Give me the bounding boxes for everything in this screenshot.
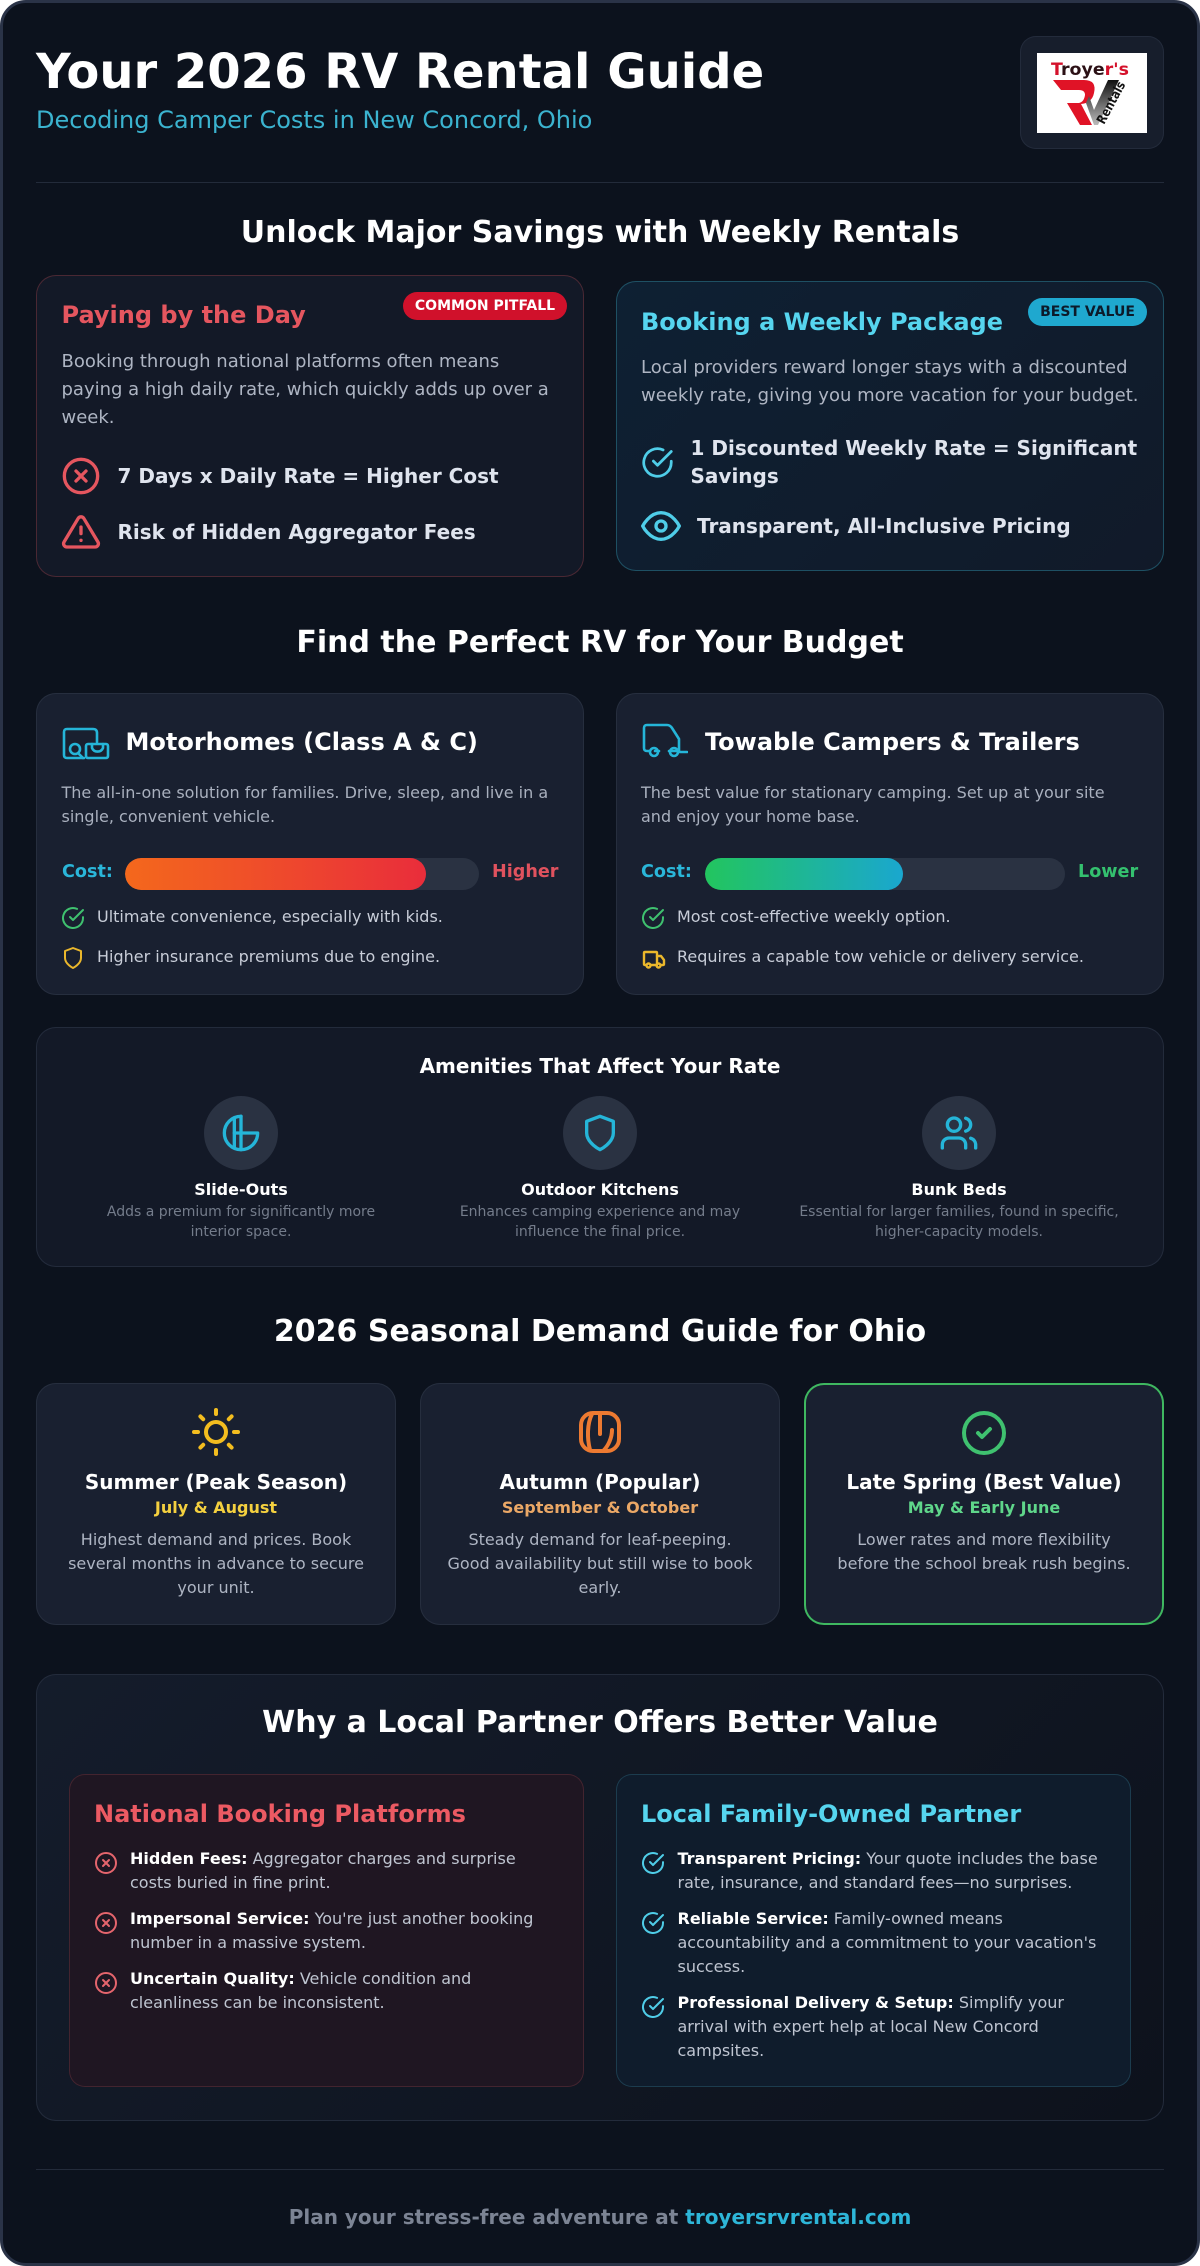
type heading: Towable Campers & Trailers (705, 728, 1080, 756)
con: Requires a capable tow vehicle or delivery service. (677, 947, 1084, 966)
detail: Adds a premium for significantly more (107, 1204, 375, 1220)
season detail: Good availability but still wise to book (448, 1554, 752, 1573)
icon: x circle (62, 458, 100, 494)
item: reliable service: accountability and a commitment to your vacation's (678, 1933, 1096, 1952)
item: hidden fees: Hidden Fees: Aggregator charges and surprise (130, 1849, 516, 1868)
season detail: early. (579, 1578, 621, 1597)
detail (460, 1204, 740, 1240)
detail: higher-capacity models. (875, 1224, 1043, 1240)
badge: common pitfall: COMMON PITFALL (415, 298, 555, 314)
panel heading: Booking a Weekly Package (641, 308, 1003, 336)
comparison heading: Why a Local Partner Offers Better Value (262, 1705, 938, 1740)
icon: check (642, 1912, 664, 1934)
item: delivery and setup: arrival with expert help at local New Concord (678, 2017, 1039, 2036)
season detail (68, 1530, 364, 1597)
icon: x (95, 1972, 117, 1994)
type heading: Motorhomes (Class A & C) (126, 728, 478, 756)
panel: towables (616, 693, 1164, 995)
description: Local providers reward longer stays with a discounted (641, 357, 1128, 378)
panel: amenities (36, 1027, 1164, 1267)
subtitle: Decoding Camper Costs in New Concord, Ohio (36, 106, 592, 134)
icon: check (62, 907, 84, 929)
feature: hidden fees: Risk of Hidden Aggregator Fees (118, 520, 476, 544)
cost meter (62, 858, 558, 890)
amenity: slide-outs (107, 1096, 375, 1240)
pro: Most cost-effective weekly option. (677, 907, 951, 926)
season detail: before the school break rush begins. (837, 1554, 1131, 1573)
season name: Late Spring (Best Value) (846, 1470, 1122, 1494)
con: Higher insurance premiums due to engine. (97, 947, 440, 966)
amenity: outdoor kitchens (460, 1096, 740, 1240)
item: delivery and setup: Professional Delivery & Setup: Simplify your (678, 1993, 1064, 2012)
detail (799, 1204, 1119, 1240)
cost value: Higher (492, 862, 558, 882)
icon: x (95, 1912, 117, 1934)
season detail (837, 1530, 1131, 1573)
item: impersonal service (130, 1909, 533, 1952)
column: local partner (616, 1774, 1131, 2087)
icon: x (95, 1852, 117, 1874)
description: The all-in-one solution for families. Drive, sleep, and live in a (62, 783, 548, 802)
cost value: Lower (1078, 862, 1138, 882)
description: week. (62, 407, 115, 428)
item: transparent pricing: rate, insurance, and standard fees—no surprises. (678, 1873, 1072, 1892)
season detail (448, 1530, 752, 1597)
logo card (1020, 36, 1164, 149)
description (640, 783, 1105, 826)
item: uncertain quality: Uncertain Quality: Vehicle condition and (130, 1969, 471, 1988)
item: hidden fees: costs buried in fine print. (130, 1873, 331, 1892)
bar: 55 percent (705, 858, 1065, 890)
cost meter (641, 858, 1138, 890)
description (62, 351, 549, 428)
icon: check circle (642, 447, 673, 478)
icon circle (563, 1096, 637, 1170)
feature: discounted rate (690, 436, 1137, 488)
icon: motorhome (62, 728, 110, 760)
description: single, convenient vehicle. (62, 807, 275, 826)
item: delivery and setup: campsites. (678, 2041, 764, 2060)
icon: warning (62, 515, 100, 549)
item: transparent pricing (678, 1849, 1098, 1892)
description (641, 357, 1138, 406)
badge: best value (1028, 298, 1147, 326)
season dates: July & August (155, 1498, 277, 1517)
title: Your 2026 RV Rental Guide (36, 44, 764, 100)
icon circle (204, 1096, 278, 1170)
panel: paying by the day (36, 275, 584, 577)
icon: check (642, 907, 664, 929)
season dates: September & October (502, 1498, 698, 1517)
name: Outdoor Kitchens (521, 1180, 679, 1199)
heading: weekly savings: Unlock Major Savings with Weekly Rentals (241, 215, 959, 250)
item: hidden fees (130, 1849, 516, 1892)
description (61, 783, 548, 826)
season detail: Highest demand and prices. Book (81, 1530, 351, 1549)
description: The best value for stationary camping. Set up at your site (641, 783, 1105, 802)
item: uncertain quality: cleanliness can be inconsistent. (130, 1993, 385, 2012)
footer: Plan your stress-free adventure at troyersrvrental.com (289, 2205, 911, 2229)
icon: check circle (962, 1411, 1006, 1455)
panel: autumn (420, 1383, 780, 1625)
item: transparent pricing: Transparent Pricing: Your quote includes the base (678, 1849, 1098, 1868)
column heading: National Booking Platforms (94, 1800, 466, 1828)
item: uncertain quality (130, 1969, 471, 2012)
panel: late spring (804, 1383, 1164, 1625)
season detail: several months in advance to secure (68, 1554, 364, 1573)
panel: motorhomes (36, 693, 584, 995)
panel: summer (36, 1383, 396, 1625)
detail: influence the final price. (515, 1224, 685, 1240)
badge: common pitfall (403, 292, 567, 320)
icon: leaf tile (579, 1411, 621, 1453)
feature: transparent pricing: Transparent, All-Inclusive Pricing (697, 514, 1071, 538)
logo: Troyer's RV Rentals: Troyer's (1051, 60, 1129, 80)
detail (107, 1204, 375, 1240)
season name: Autumn (Popular) (499, 1470, 700, 1494)
amenities heading: Amenities That Affect Your Rate (420, 1054, 780, 1078)
season detail: Lower rates and more flexibility (857, 1530, 1111, 1549)
feature: discounted rate: Savings (690, 464, 779, 488)
pro: Ultimate convenience, especially with kids. (97, 907, 443, 926)
heading: seasons: 2026 Seasonal Demand Guide for Ohio (274, 1314, 926, 1349)
item: impersonal service: number in a massive system. (130, 1933, 366, 1952)
icon: sun (192, 1408, 240, 1456)
icon: eye (641, 511, 681, 541)
icon: check (642, 1996, 664, 2018)
name: Slide-Outs (194, 1180, 288, 1199)
description: weekly rate, giving you more vacation for your budget. (641, 385, 1138, 406)
season detail: Steady demand for leaf-peeping. (468, 1530, 732, 1549)
icon: trailer (642, 724, 688, 758)
panel heading: Paying by the Day (62, 301, 306, 329)
season detail: your unit. (177, 1578, 255, 1597)
description: and enjoy your home base. (641, 807, 860, 826)
feature: discounted rate: 1 Discounted Weekly Rate = Significant (690, 436, 1137, 460)
detail: interior space. (191, 1224, 291, 1240)
detail: Enhances camping experience and may (460, 1204, 740, 1220)
season name: Summer (Peak Season) (85, 1470, 347, 1494)
item: reliable service: success. (678, 1957, 745, 1976)
column: national platforms (69, 1774, 584, 2087)
icon: check (642, 1852, 664, 1874)
item: reliable service: Reliable Service: Family-owned means (678, 1909, 1003, 1928)
description: Booking through national platforms often means (62, 351, 499, 372)
item: reliable service (678, 1909, 1096, 1976)
description: paying a high daily rate, which quickly adds up over a (62, 379, 549, 400)
badge: best value: BEST VALUE (1040, 304, 1135, 320)
icon: shield (64, 947, 82, 969)
icon circle (922, 1096, 996, 1170)
column heading: Local Family-Owned Partner (641, 1800, 1021, 1828)
feature: higher cost: 7 Days x Daily Rate = Higher Cost (118, 464, 499, 488)
item: impersonal service: Impersonal Service: You're just another booking (130, 1909, 533, 1928)
cost label: Cost: (62, 862, 113, 882)
panel: weekly package (616, 281, 1164, 571)
item: delivery and setup (678, 1991, 1064, 2063)
season dates: May & Early June (908, 1498, 1060, 1517)
heading: budget: Find the Perfect RV for Your Budget (296, 625, 904, 660)
cost label: Cost: (641, 862, 692, 882)
logo: Troyer's RV Rentals (1037, 53, 1147, 133)
name: Bunk Beds (911, 1180, 1007, 1199)
logo: Troyer's RV Rentals: Rentals (1094, 79, 1129, 127)
amenity: bunk beds (799, 1096, 1119, 1240)
icon: truck (642, 950, 666, 969)
detail: Essential for larger families, found in specific, (799, 1204, 1119, 1220)
bar: 85 percent (125, 858, 479, 890)
panel: local partner comparison (36, 1674, 1164, 2121)
